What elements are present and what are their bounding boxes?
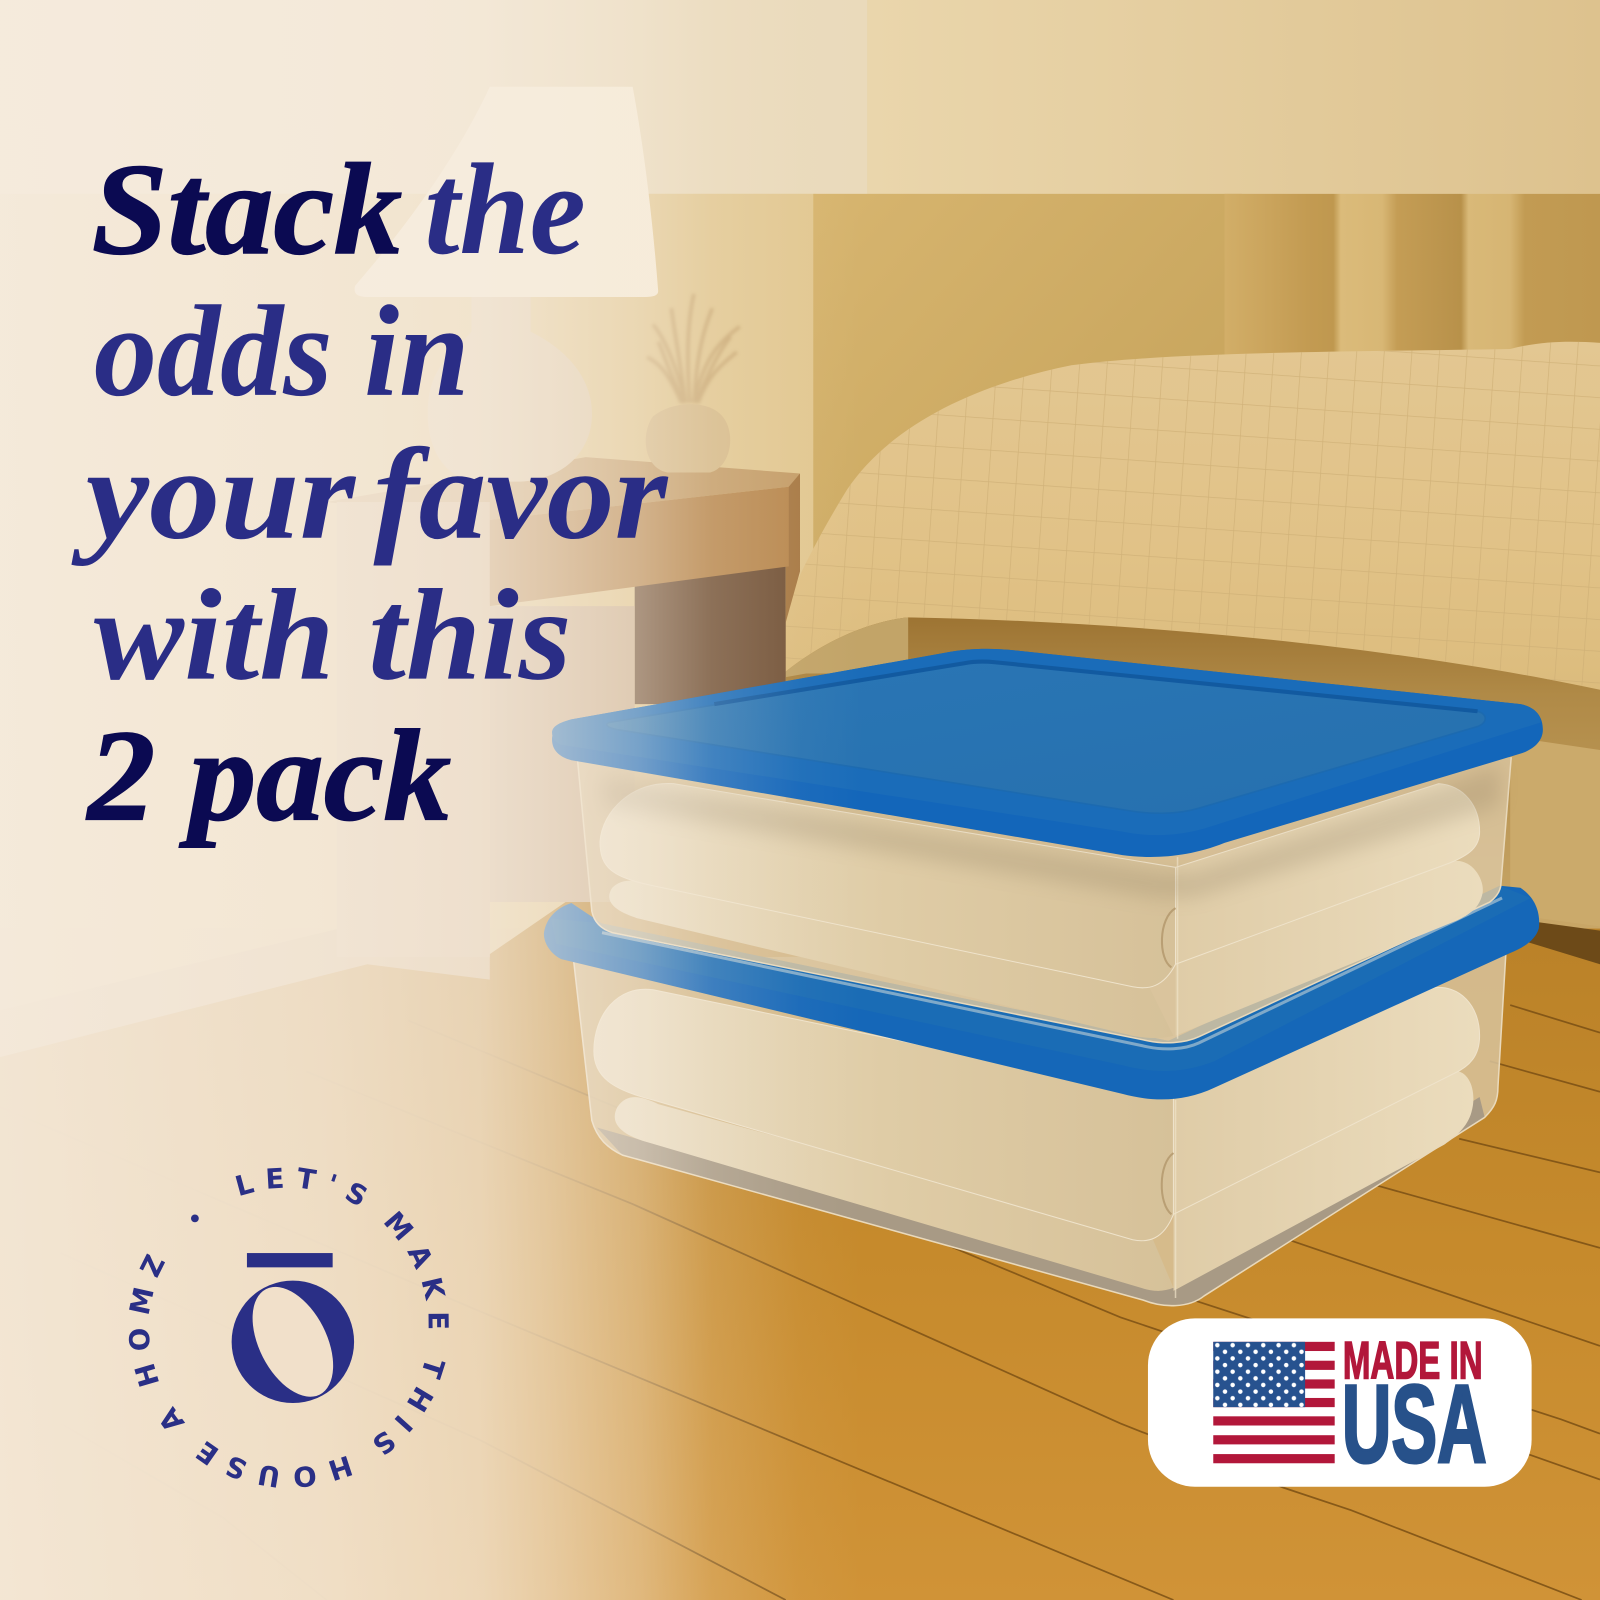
separator dot <box>191 1214 199 1222</box>
bed frame <box>786 617 1600 929</box>
curtain <box>1224 194 1600 500</box>
line 3: your <box>70 423 356 567</box>
label: made in: MADE IN <box>1343 1332 1483 1391</box>
logo bar <box>247 1253 333 1267</box>
circular tagline: LET'S MAKE THIS HOUSE A HOMZ <box>128 1167 449 1488</box>
circular brand logo <box>128 1167 449 1488</box>
lid inner rim <box>602 898 1502 1049</box>
upper blue lid <box>552 649 1543 857</box>
lower box floor tray <box>597 1097 1485 1306</box>
line 4: with this <box>94 564 571 708</box>
lid recessed panel <box>607 662 1485 813</box>
bed blanket <box>767 342 1600 690</box>
floorboards <box>0 1005 1600 1600</box>
headline <box>70 138 669 848</box>
white fade overlay <box>0 0 867 1600</box>
icon: US flag <box>1213 1342 1335 1463</box>
line 2: odds in <box>94 280 469 424</box>
line 1: the <box>424 138 586 282</box>
product: stacked storage boxes <box>544 649 1543 1306</box>
nightstand <box>327 457 800 957</box>
vase with dried plant <box>646 294 740 472</box>
line 3 <box>70 423 669 567</box>
lower towel, top fold <box>594 987 1480 1241</box>
baseboard <box>0 929 490 1057</box>
label: USA: USA <box>1342 1363 1487 1486</box>
upper towel, top fold <box>600 783 1480 988</box>
lower box body <box>573 949 1506 1306</box>
lower towel, bottom fold <box>615 1071 1473 1291</box>
upper wall band <box>867 0 1600 194</box>
line 1: Stack <box>92 138 402 282</box>
lamp <box>355 87 658 482</box>
upper towel, bottom fold <box>609 861 1483 1038</box>
blanket hem underside <box>778 617 908 679</box>
lower blue lid <box>544 886 1539 1099</box>
upper box body <box>578 757 1511 1043</box>
line 3: favor <box>373 423 669 567</box>
logo ring <box>232 1274 354 1410</box>
line 1 <box>92 138 586 282</box>
line 5: 2 pack <box>86 704 451 848</box>
lid back rim shadow <box>714 662 1478 711</box>
headboard wall <box>813 194 1242 663</box>
left wall <box>0 0 867 194</box>
floor <box>0 898 1600 1600</box>
badge: made in USA <box>1148 1318 1532 1487</box>
shadow under upper lid <box>602 765 1500 898</box>
